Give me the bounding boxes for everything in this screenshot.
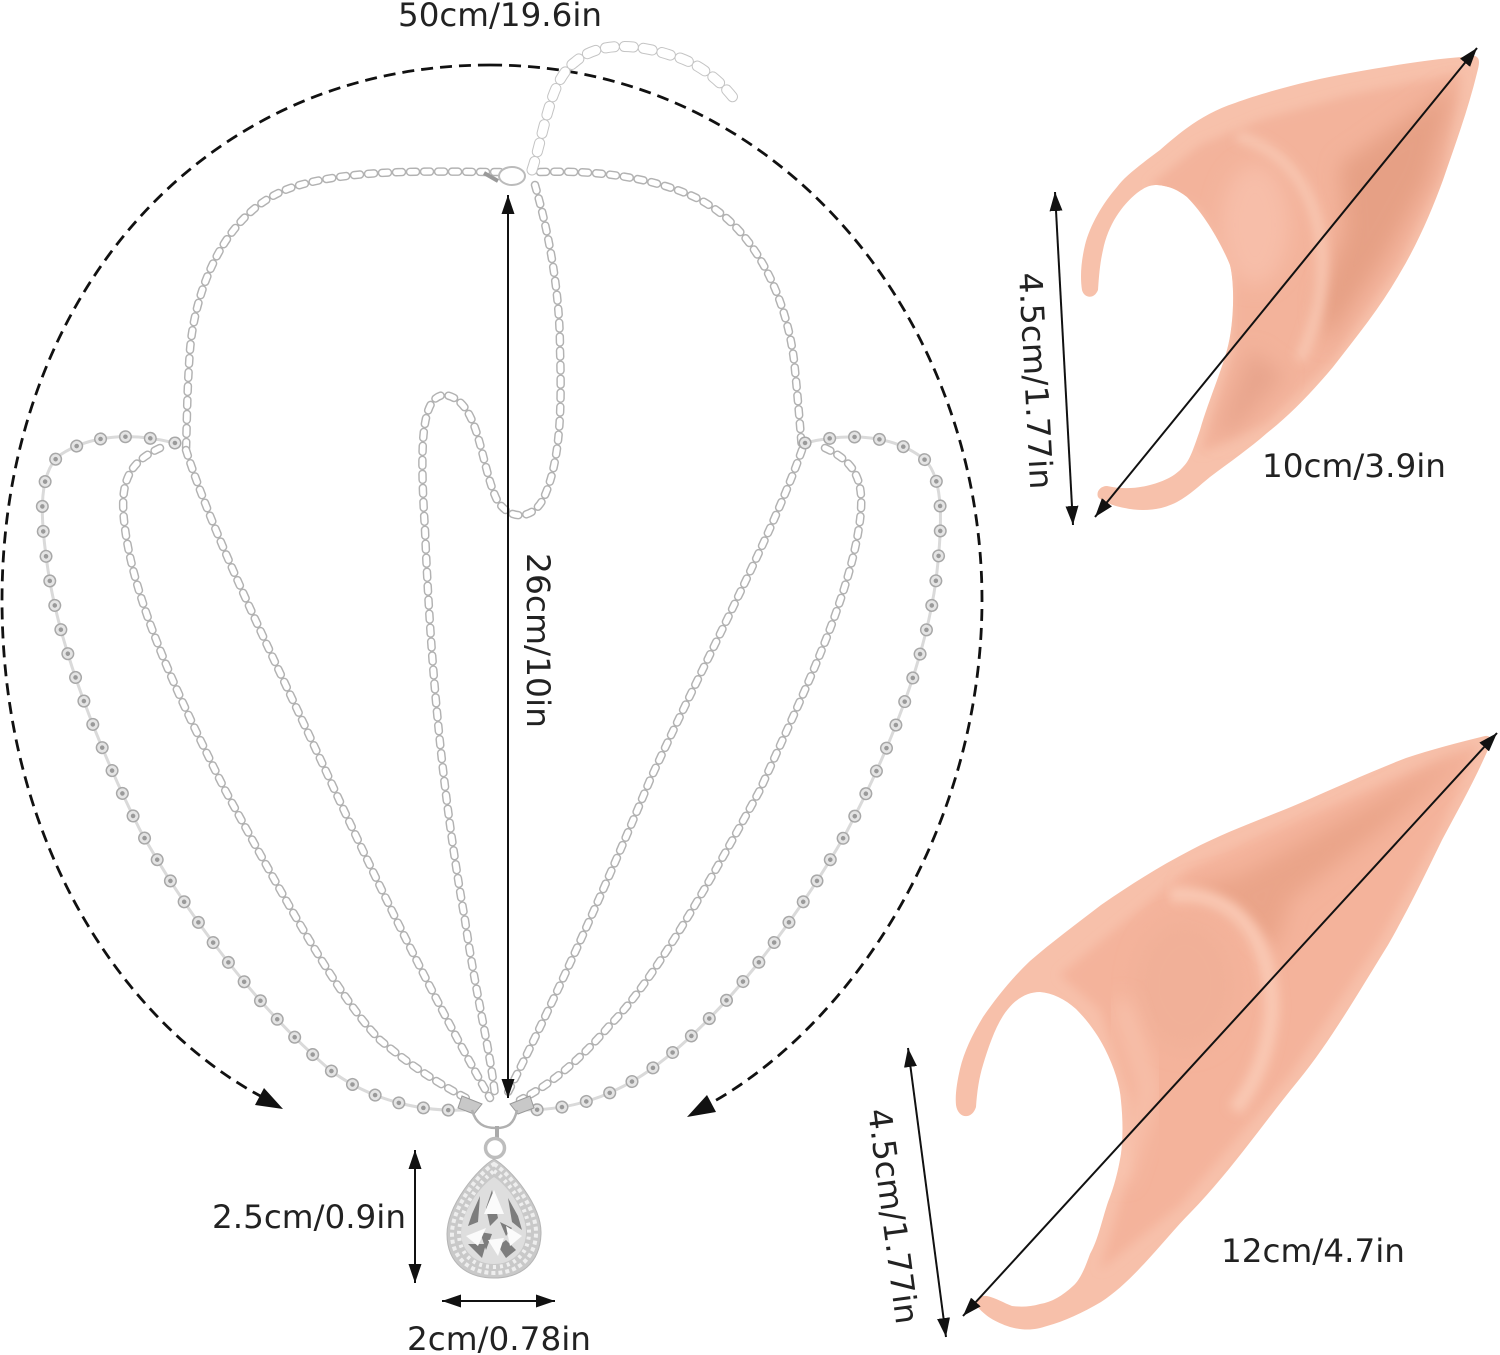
- arrow: small ear opening: [1055, 192, 1073, 525]
- ear shading: [1060, 745, 1478, 1270]
- dashed arc: right: [490, 65, 982, 1108]
- dashed circumference arrows: [2, 65, 982, 1117]
- label: chain length: 26cm/10in: [519, 553, 557, 728]
- chain: inner left strand: [186, 450, 490, 1098]
- label: pendant height: 2.5cm/0.9in: [212, 1198, 406, 1236]
- head chain: [42, 46, 940, 1114]
- chain: middle strand: [422, 185, 561, 1095]
- arrowhead: left: [255, 1088, 283, 1109]
- arrow: pendant width: [442, 1300, 555, 1302]
- arrow: small ear width: [1095, 48, 1477, 517]
- ear silhouette: [1081, 56, 1479, 510]
- lobster clasp: [484, 167, 525, 185]
- ear silhouette: [956, 736, 1490, 1330]
- rhinestone strand: left: [42, 437, 465, 1110]
- arrowhead: right: [687, 1095, 716, 1117]
- label: small ear length: 10cm/3.9in: [1262, 447, 1446, 485]
- pendant: [447, 1110, 541, 1278]
- centre connector claws: [458, 1096, 534, 1114]
- chain: upper left strand: [186, 172, 500, 450]
- arrow: chain length: [507, 195, 509, 1098]
- teardrop crystal: [461, 1177, 526, 1264]
- arrow: large ear opening: [908, 1048, 946, 1337]
- label: large ear length: 12cm/4.7in: [1221, 1232, 1405, 1270]
- chain: inner right strand: [505, 450, 802, 1098]
- label: small ear opening: 4.5cm/1.77in: [1011, 271, 1060, 490]
- arrow: pendant height: [414, 1150, 416, 1283]
- chain: extender: [532, 46, 737, 170]
- arrow: large ear length: [963, 733, 1497, 1316]
- rhinestone strand: right: [525, 437, 940, 1110]
- link: [495, 1126, 499, 1140]
- small elf ear: [1081, 56, 1479, 510]
- chain: upper right strand: [540, 172, 802, 450]
- label: large ear opening: 4.5cm/1.77in: [860, 1106, 926, 1326]
- chain: outer right strand: [520, 448, 861, 1100]
- chain: outer left strand: [123, 448, 470, 1100]
- ear shading: [1150, 72, 1462, 453]
- teardrop halo: [447, 1159, 541, 1278]
- dashed arc: left: [2, 65, 490, 1100]
- large elf ear: [956, 736, 1490, 1330]
- bail ring: [486, 1138, 504, 1158]
- connector ring: [472, 1110, 517, 1128]
